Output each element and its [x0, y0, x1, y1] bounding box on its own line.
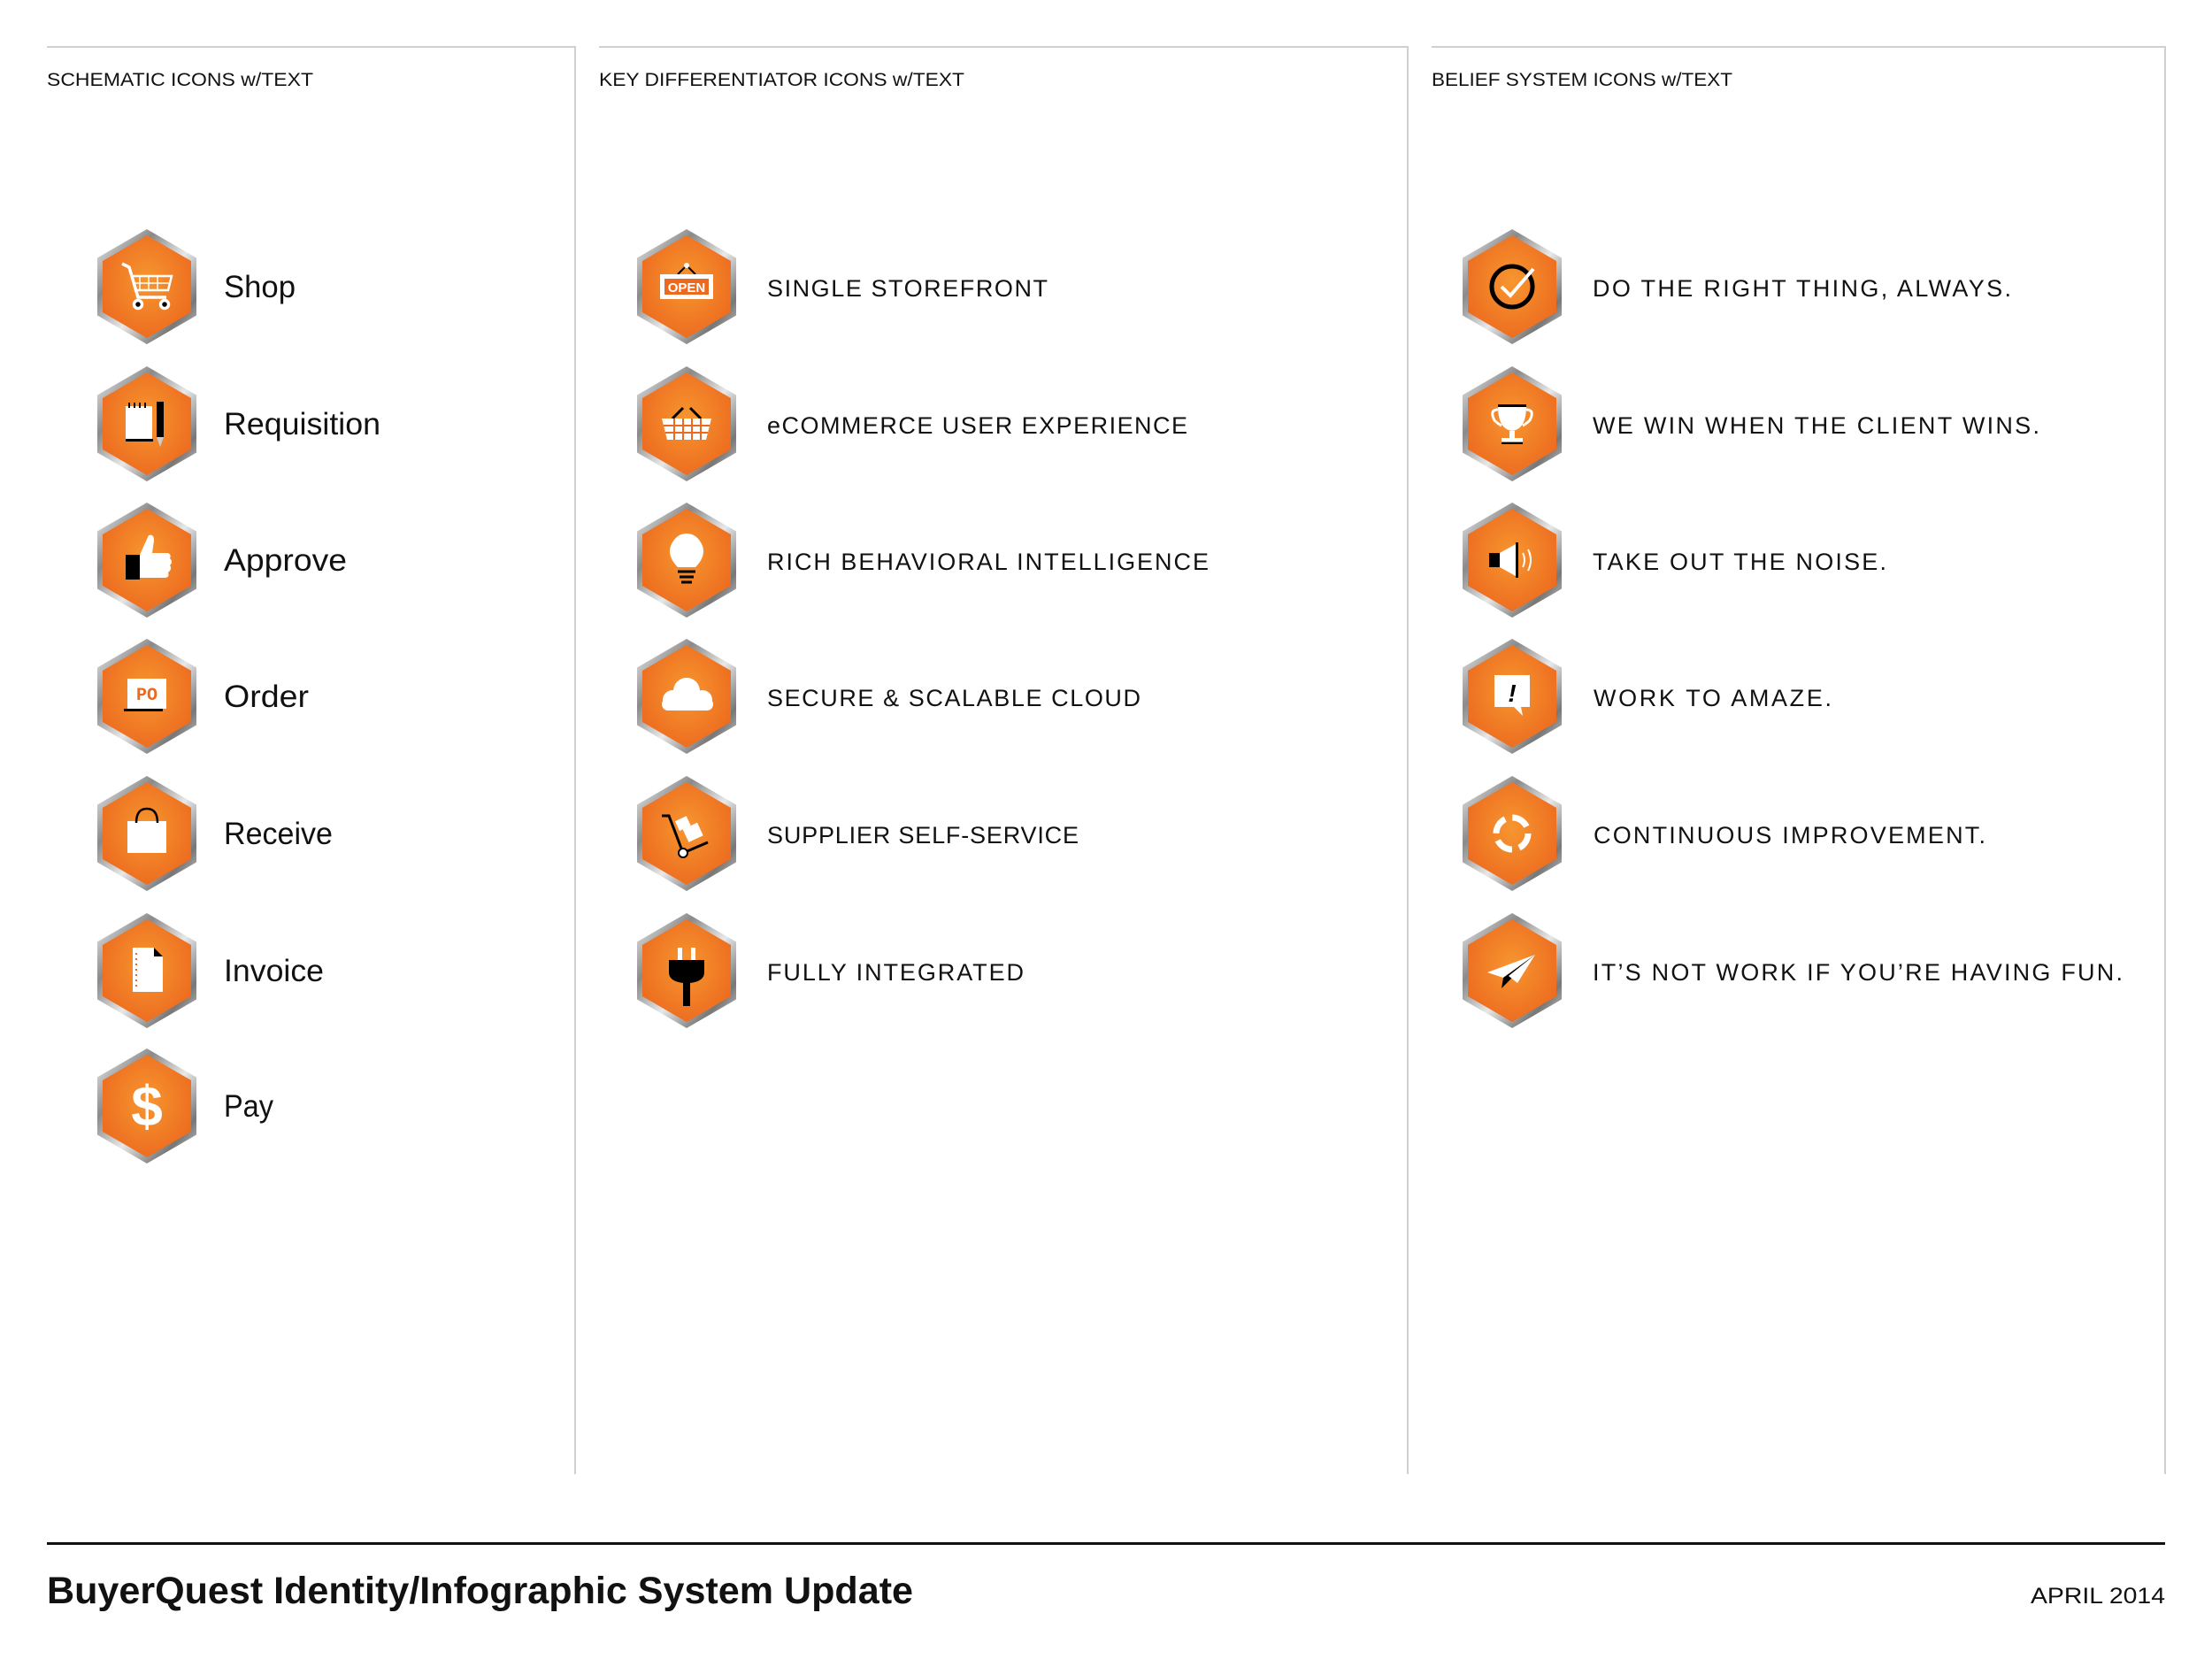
item: invoice: Invoice — [224, 954, 324, 988]
item: plug — [637, 913, 1024, 1028]
item: work to amaze: WORK TO AMAZE. — [1594, 685, 1832, 711]
item: plug: FULLY INTEGRATED — [767, 959, 1024, 986]
item: approve: Approve — [224, 543, 347, 578]
item: do the right thing — [1463, 229, 2011, 344]
item: trophy: WE WIN WHEN THE CLIENT WINS. — [1593, 412, 2039, 439]
item: pay: Pay — [224, 1089, 273, 1124]
heading: key differentiator: KEY DIFFERENTIATOR ICONS w/TEXT — [599, 70, 964, 90]
item: continuous improvement — [1463, 776, 1985, 891]
item: trophy — [1463, 366, 2039, 481]
item: work to amaze: ! — [1508, 680, 1517, 707]
footer title: BuyerQuest Identity/Infographic System Update — [47, 1570, 913, 1612]
item: requisition: Requisition — [224, 407, 380, 442]
item: cloud — [637, 639, 1141, 754]
item: bulb — [637, 503, 1209, 618]
item: receive: Receive — [224, 817, 333, 851]
item: ecommerce — [637, 366, 1187, 481]
item: requisition — [97, 366, 380, 481]
item: order: PO — [136, 686, 157, 706]
item: continuous improvement: CONTINUOUS IMPROVEMENT. — [1594, 822, 1985, 849]
panel: key differentiator icons — [599, 47, 1408, 1474]
item: approve — [97, 503, 347, 618]
panel: belief system icons — [1432, 47, 2165, 1474]
item: shop: Shop — [224, 270, 296, 304]
panel: schematic icons — [47, 47, 575, 1474]
item: speaker — [1463, 503, 1886, 618]
item: hand truck: SUPPLIER SELF-SERVICE — [767, 822, 1079, 849]
item: speaker: TAKE OUT THE NOISE. — [1593, 549, 1886, 575]
item: shop — [97, 229, 296, 344]
item: do the right thing: DO THE RIGHT THING, ALWAYS. — [1593, 275, 2011, 302]
heading: belief system: BELIEF SYSTEM ICONS w/TEXT — [1432, 70, 1732, 90]
item: cloud: SECURE & SCALABLE CLOUD — [767, 685, 1141, 711]
item: work to amaze — [1463, 639, 1832, 754]
heading: schematic: SCHEMATIC ICONS w/TEXT — [47, 70, 313, 90]
item: paper plane: IT’S NOT WORK IF YOU’RE HAVING FUN. — [1593, 959, 2123, 986]
item: single storefront: OPEN — [668, 280, 705, 296]
item: ecommerce: eCOMMERCE USER EXPERIENCE — [767, 412, 1187, 439]
item: pay: $ — [131, 1074, 163, 1138]
item: single storefront: SINGLE STOREFRONT — [767, 275, 1048, 302]
item: order — [97, 639, 309, 754]
item: order: Order — [224, 680, 309, 714]
item: pay — [97, 1048, 273, 1164]
item: bulb: RICH BEHAVIORAL INTELLIGENCE — [767, 549, 1209, 575]
item: invoice — [97, 913, 324, 1028]
item: single storefront — [637, 229, 1048, 344]
item: paper plane — [1463, 913, 2123, 1028]
item: receive — [97, 776, 333, 891]
footer — [47, 1542, 2165, 1612]
footer date: APRIL 2014 — [2031, 1584, 2165, 1609]
item: hand truck — [637, 776, 1079, 891]
